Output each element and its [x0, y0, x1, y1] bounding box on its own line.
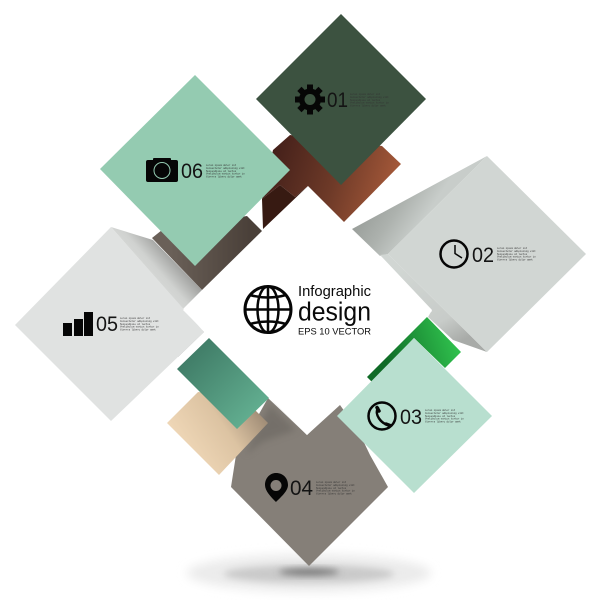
lorem text 05: Vestibulum varius tortor in [120, 326, 159, 329]
icon: camera [146, 158, 178, 182]
panel 05 [15, 227, 204, 421]
lorem text 03: Suspendisse at lectus [425, 415, 456, 418]
lorem text 01: Consectetur adipiscing elit [350, 96, 389, 99]
lorem text 06: Lorem ipsum dolor sit [206, 164, 237, 167]
lorem text 04: Consectetur adipiscing elit [316, 484, 355, 487]
lorem text 01: Viverra libero dolor amet [350, 105, 386, 108]
lorem text 02: Consectetur adipiscing elit [497, 250, 536, 253]
panel 03 [337, 338, 492, 493]
lorem text 02: Suspendisse at lectus [497, 253, 528, 256]
icon: bars [63, 312, 93, 336]
title: Infographic [298, 284, 371, 300]
lorem text 01: Suspendisse at lectus [350, 99, 381, 102]
lorem text 05: Viverra libero dolor amet [120, 329, 156, 332]
lorem text 04: Viverra libero dolor amet [316, 493, 352, 496]
lorem text 02: Lorem ipsum dolor sit [497, 247, 528, 250]
shaded corner of panel 04 [245, 405, 296, 455]
icon: gear [295, 84, 325, 114]
lorem text 05: Lorem ipsum dolor sit [120, 317, 151, 320]
floor shadow [187, 554, 431, 592]
panel 01 [256, 14, 426, 185]
lorem text 06: Consectetur adipiscing elit [206, 167, 245, 170]
title: design [298, 298, 371, 326]
lorem text 03: Consectetur adipiscing elit [425, 412, 464, 415]
lorem text 05: Suspendisse at lectus [120, 323, 151, 326]
lorem text 04: Vestibulum varius tortor in [316, 490, 355, 493]
lorem text 06: Vestibulum varius tortor in [206, 173, 245, 176]
icon: clock [440, 240, 468, 268]
central white diamond [183, 190, 432, 435]
green ribbon behind panel 03 [367, 317, 461, 382]
tan square [167, 392, 268, 475]
panel 06 [100, 75, 290, 266]
teal square [177, 338, 269, 429]
panel 02 [352, 156, 586, 352]
number 03: 03 [400, 406, 422, 429]
title: EPS 10 VECTOR [298, 326, 371, 338]
lorem text 04: Suspendisse at lectus [316, 487, 347, 490]
panel 04 [231, 398, 388, 566]
number 04: 04 [290, 477, 313, 500]
title [298, 284, 371, 338]
lorem text 04: Lorem ipsum dolor sit [316, 481, 347, 484]
lorem text 01: Vestibulum varius tortor in [350, 102, 389, 105]
lorem text 01: Lorem ipsum dolor sit [350, 93, 381, 96]
lorem text 02: Viverra libero dolor amet [497, 259, 533, 262]
lorem text 03: Viverra libero dolor amet [425, 421, 461, 424]
lorem text 06: Viverra libero dolor amet [206, 176, 242, 179]
lorem text 02: Vestibulum varius tortor in [497, 256, 536, 259]
icon: map pin [265, 473, 288, 502]
icon: globe [245, 286, 291, 332]
lorem text 06: Suspendisse at lectus [206, 170, 237, 173]
number 06: 06 [181, 160, 203, 183]
icon: phone [368, 402, 396, 430]
number 01: 01 [327, 89, 348, 112]
lorem text 03: Vestibulum varius tortor in [425, 418, 464, 421]
taupe strip behind panel 06 [152, 216, 262, 290]
lorem text 05: Consectetur adipiscing elit [120, 320, 159, 323]
brown ribbon behind panel 01 [262, 135, 401, 229]
number 02: 02 [472, 244, 494, 267]
number 05: 05 [96, 313, 118, 336]
lorem text 03: Lorem ipsum dolor sit [425, 409, 456, 412]
